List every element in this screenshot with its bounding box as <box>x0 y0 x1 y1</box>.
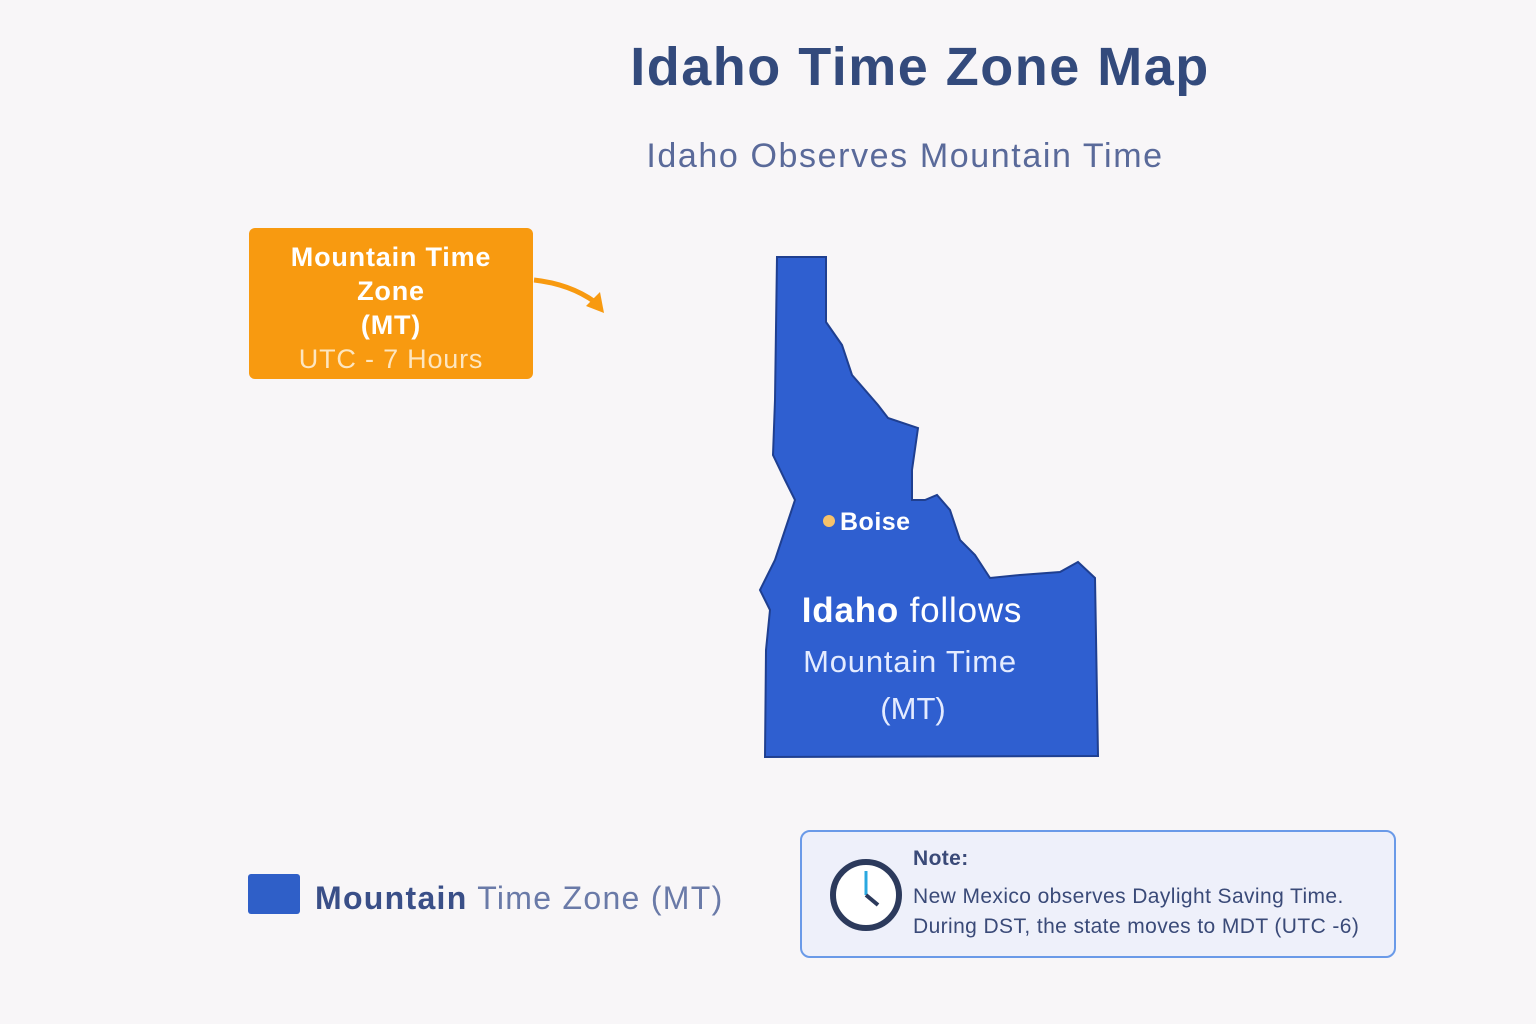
note text: New Mexico observes Daylight Saving Time. <box>913 885 1344 908</box>
map text: (MT) <box>880 691 946 726</box>
label: Boise: Boise <box>840 508 911 536</box>
callout: mountain time zone: Mountain Time <box>291 242 491 272</box>
callout: mountain time zone: UTC - 7 Hours <box>299 344 483 374</box>
map text: Mountain Time <box>803 644 1017 679</box>
arrow: callout to map <box>534 278 604 313</box>
legend: Mountain Time Zone (MT) <box>315 880 724 916</box>
note box <box>800 830 1396 958</box>
note text: Note: <box>913 847 969 870</box>
map text <box>802 591 1022 726</box>
subtitle: Idaho Observes Mountain Time <box>646 137 1164 175</box>
callout: mountain time zone: Zone <box>357 276 425 306</box>
note text: During DST, the state moves to MDT (UTC -6) <box>913 915 1359 938</box>
note text <box>913 847 1359 938</box>
title: Idaho Time Zone Map <box>630 37 1210 97</box>
map text: Idaho follows <box>802 591 1022 630</box>
callout: mountain time zone <box>249 228 533 379</box>
callout: mountain time zone: (MT) <box>361 310 421 340</box>
icon: clock <box>830 859 902 931</box>
